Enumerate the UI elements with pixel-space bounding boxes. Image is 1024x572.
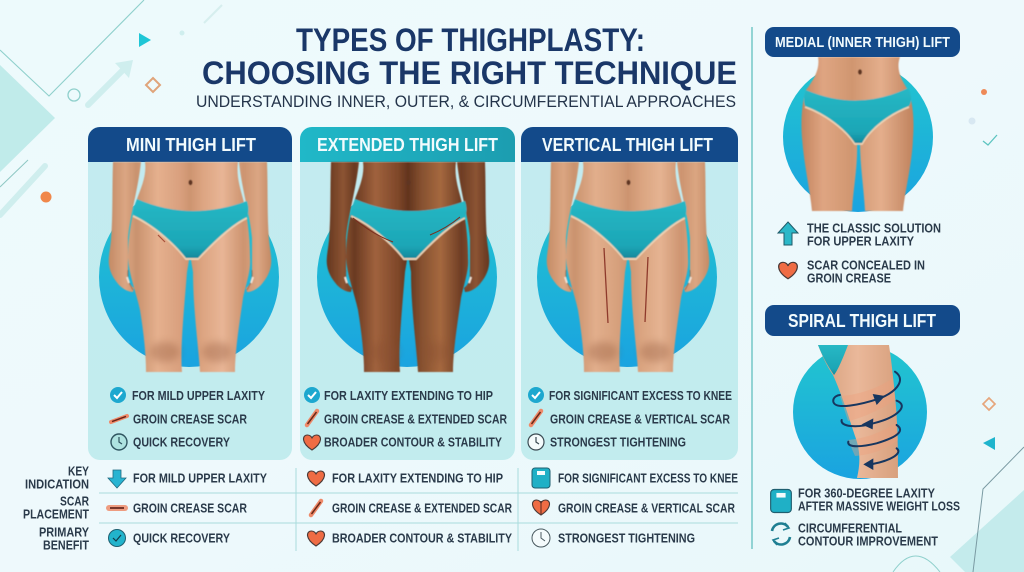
panel: medial inner thigh lift [765, 27, 960, 286]
panel header [300, 127, 515, 162]
row label: primary benefit: PRIMARY [39, 524, 89, 540]
icon: circular arrows [772, 523, 790, 545]
heading: VERTICAL THIGH LIFT [542, 135, 713, 155]
heading: MEDIAL (INNER THIGH) LIFT [775, 34, 950, 51]
bullet: indication [528, 387, 732, 403]
figure: leg with spiral arrows [818, 345, 902, 478]
bullet: benefit [528, 434, 686, 450]
text: GROIN CREASE & EXTENDED SCAR [324, 412, 507, 426]
figure [547, 162, 709, 372]
bullet: benefit [111, 434, 230, 450]
text: FOR 360-DEGREE LAXITY [798, 486, 935, 500]
icon: scale [532, 468, 550, 488]
cell text: GROIN CREASE & EXTENDED SCAR [332, 500, 512, 516]
backdrop circle [537, 187, 717, 367]
icon: scar [531, 411, 541, 425]
figure [109, 162, 271, 372]
panel: spiral thigh lift [765, 305, 960, 548]
text: FOR UPPER LAXITY [807, 234, 914, 248]
icon: check [304, 387, 320, 403]
figure [327, 162, 489, 372]
cell text: FOR MILD UPPER LAXITY [133, 470, 267, 486]
icon: heart [303, 435, 321, 450]
icon: scale [771, 490, 791, 512]
text: QUICK RECOVERY [133, 434, 230, 450]
icon: up arrow [778, 222, 798, 245]
scar [158, 235, 165, 242]
figure [801, 57, 913, 211]
decorative geometry: top left [0, 0, 222, 215]
text: STRONGEST TIGHTENING [550, 434, 686, 450]
icon: scar [307, 411, 317, 425]
panel: mini thigh lift [88, 127, 292, 460]
backdrop circle [793, 345, 927, 479]
cell text: GROIN CREASE SCAR [133, 500, 247, 516]
text: GROIN CREASE [807, 270, 891, 286]
heading pill [765, 27, 960, 57]
text: THE CLASSIC SOLUTION [807, 220, 941, 236]
bullet: indication [110, 387, 265, 403]
backdrop circle [783, 62, 933, 212]
scars [353, 217, 460, 242]
row label: scar placement: SCAR [60, 494, 89, 508]
heading: EXTENDED THIGH LIFT [317, 135, 498, 155]
cell text: FOR LAXITY EXTENDING TO HIP [332, 470, 503, 486]
backdrop circle [317, 187, 497, 367]
decorative geometry: right edge [752, 27, 1024, 572]
text: AFTER MASSIVE WEIGHT LOSS [798, 498, 960, 514]
row label: scar placement: PLACEMENT [23, 506, 89, 522]
scars [604, 248, 648, 323]
text: CONTOUR IMPROVEMENT [798, 534, 938, 548]
row label: key indication: KEY [68, 464, 89, 478]
cell text: QUICK RECOVERY [133, 530, 230, 546]
panel: vertical thigh lift [521, 127, 738, 460]
bullet: scar [111, 412, 247, 426]
panel header [88, 127, 292, 162]
icon: check [110, 387, 126, 403]
subtitle: UNDERSTANDING INNER, OUTER, & CIRCUMFERENTIAL APPROACHES [196, 93, 736, 111]
title [202, 22, 737, 91]
icon: heart with scar [532, 500, 550, 515]
icon: clock [111, 434, 127, 450]
bullet: indication [304, 387, 493, 403]
icon: heart [779, 262, 797, 279]
icon: check [528, 387, 544, 403]
title: CHOOSING THE RIGHT TECHNIQUE [202, 55, 737, 91]
text: FOR MILD UPPER LAXITY [132, 388, 265, 403]
text: BROADER CONTOUR & STABILITY [324, 434, 502, 450]
comparison table [23, 464, 738, 552]
icon: scar [111, 416, 127, 422]
icon: check [108, 530, 126, 546]
icon: clock [528, 434, 544, 450]
icon: heart [307, 531, 325, 546]
icon: diagonal scar [311, 501, 321, 515]
cell text: BROADER CONTOUR & STABILITY [332, 530, 512, 546]
text: CIRCUMFERENTIAL [798, 520, 902, 536]
row label: primary benefit: BENEFIT [43, 538, 89, 552]
text: FOR SIGNIFICANT EXCESS TO KNEE [549, 388, 732, 403]
heading: MINI THIGH LIFT [126, 135, 256, 155]
backdrop circle [99, 187, 279, 367]
panel: extended thigh lift [300, 127, 515, 460]
row label: key indication: INDICATION [25, 476, 89, 492]
text: SCAR CONCEALED IN [807, 258, 925, 272]
text: GROIN CREASE SCAR [133, 412, 247, 426]
bullet: scar [307, 411, 507, 426]
icon: straight scar [109, 505, 125, 511]
title: TYPES OF THIGHPLASTY: [296, 22, 645, 58]
icon: clock [532, 529, 550, 547]
cell text: FOR SIGNIFICANT EXCESS TO KNEE [558, 470, 738, 486]
bullet: scar [531, 411, 730, 426]
panel header [521, 127, 738, 162]
icon: down arrow [108, 470, 126, 488]
icon: heart [307, 471, 325, 486]
bullet: benefit [303, 434, 502, 450]
heading pill [765, 305, 960, 336]
text: GROIN CREASE & VERTICAL SCAR [550, 412, 730, 426]
cell text: GROIN CREASE & VERTICAL SCAR [558, 500, 735, 516]
cell text: STRONGEST TIGHTENING [558, 530, 695, 546]
heading: SPIRAL THIGH LIFT [788, 311, 936, 331]
text: FOR LAXITY EXTENDING TO HIP [324, 388, 493, 403]
